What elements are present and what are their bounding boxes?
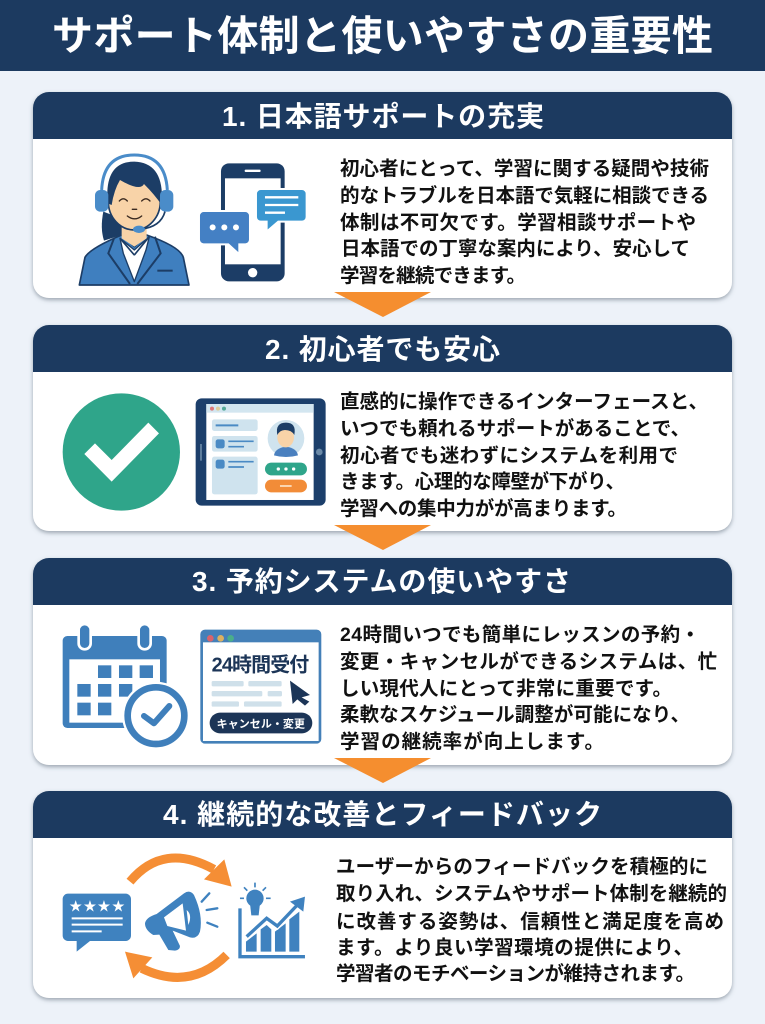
text block 1: 学習を継続できます。: [340, 264, 526, 287]
heading bar 1: 1. 日本語サポートの充実: [222, 101, 544, 132]
text block 4: 取り入れ、システムやサポート体制を継続的: [336, 883, 727, 905]
icon: review bubble, megaphone, cycle arrows and growth chart: ★: [84, 899, 97, 913]
icon: 24-hour booking window: キャンセル・変更: [217, 717, 305, 731]
text block 1: [340, 157, 709, 287]
text block 3: しい現代人にとって非常に重要です。: [340, 678, 672, 700]
icon: tablet with simple interface: [196, 398, 326, 506]
title banner: [0, 0, 765, 71]
arrow 3: [334, 758, 431, 783]
text block 2: いつでも頼れるサポートがあることで、: [340, 417, 690, 440]
text block 1: 的なトラブルを日本語で気軽に相談できる: [340, 184, 709, 207]
text block 2: [340, 390, 708, 520]
icon: review bubble, megaphone, cycle arrows and growth chart: [63, 858, 305, 978]
icon: review bubble, megaphone, cycle arrows and growth chart: ★: [112, 899, 125, 913]
title banner: サポート体制と使いやすさの重要性: [52, 13, 713, 59]
icon: smartphone with chat bubbles: [199, 163, 307, 281]
card background: [33, 92, 732, 298]
text block 4: ます。より良い学習環境の提供により、: [336, 936, 693, 959]
text block 3: 変更・キャンセルができるシステムは、忙: [340, 650, 717, 673]
arrow 1: [334, 292, 431, 317]
panel: beginner friendly: [33, 325, 732, 531]
text block 4: [336, 856, 727, 985]
card background: [33, 791, 732, 998]
icon: 24-hour booking window: [200, 630, 321, 744]
arrow 2: [334, 525, 431, 550]
text block 2: 初心者でも迷わずにシステムを利用で: [340, 445, 678, 467]
text block 1: 体制は不可欠です。学習相談サポートや: [340, 211, 696, 234]
panel: booking system: [33, 558, 732, 765]
heading bar 2: 2. 初心者でも安心: [265, 334, 500, 365]
text block 2: きます。心理的な障壁が下がり、: [340, 470, 625, 493]
heading bar 1: [33, 92, 732, 139]
text block 2: 学習への集中力がが高まります。: [340, 497, 627, 520]
icon: 24-hour booking window: 24時間受付: [212, 654, 309, 677]
icon: review bubble, megaphone, cycle arrows and growth chart: ★: [69, 899, 82, 913]
text block 3: 柔軟なスケジュール調整が可能になり、: [340, 703, 690, 726]
panel: Japanese support: [33, 92, 732, 298]
text block 1: 日本語での丁寧な案内により、安心して: [341, 238, 690, 260]
heading bar 4: [33, 791, 732, 838]
text block 2: 直感的に操作できるインターフェースと、: [340, 390, 708, 413]
text block 4: に改善する姿勢は、信頼性と満足度を高め: [336, 910, 724, 933]
card background: [33, 325, 732, 531]
text block 3: 学習の継続率が向上します。: [340, 730, 604, 753]
icon: calendar with check badge: [63, 624, 190, 750]
icon: support operator with headset: [79, 155, 189, 285]
heading bar 2: [33, 325, 732, 372]
text block 1: 初心者にとって、学習に関する疑問や技術: [340, 157, 709, 180]
icon: review bubble, megaphone, cycle arrows and growth chart: ★: [98, 899, 111, 913]
text block 3: [340, 623, 717, 753]
text block 4: ユーザーからのフィードバックを積極的に: [336, 856, 708, 878]
card background: [33, 558, 732, 765]
heading bar 3: [33, 558, 732, 605]
heading bar 4: 4. 継続的な改善とフィードバック: [163, 799, 602, 830]
text block 4: 学習者のモチベーションが維持されます。: [336, 962, 695, 985]
text block 3: 24時間いつでも簡単にレッスンの予約・: [340, 623, 700, 646]
icon: green check mark: [63, 393, 180, 511]
panel: continuous improvement: [33, 791, 732, 998]
heading bar 3: 3. 予約システムの使いやすさ: [192, 566, 571, 597]
